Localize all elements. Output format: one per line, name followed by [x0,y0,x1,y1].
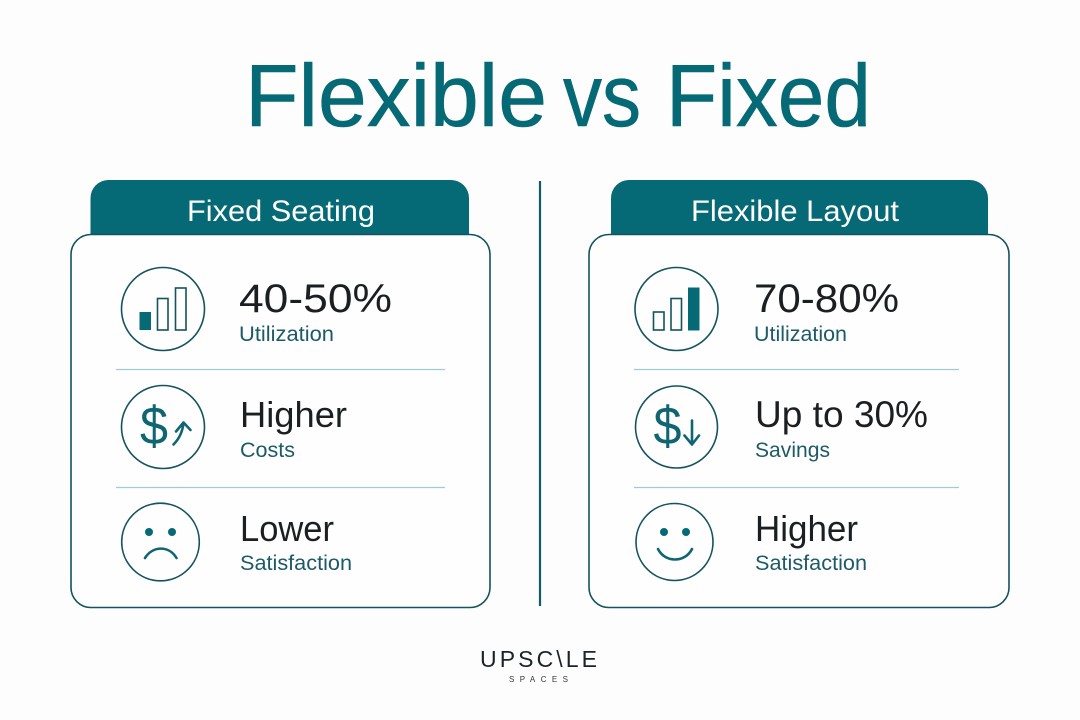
row: satisfaction [122,503,352,581]
label: savings: Savings [755,439,830,462]
stat: higher: Higher [240,394,347,435]
title: Flexible [245,46,547,145]
row: satisfaction [636,504,867,580]
stat: lower: Lower [240,508,334,549]
logo: upscale spaces [480,646,597,684]
icon: low bar chart [122,268,204,350]
header tab: flexible layout [611,180,988,240]
header tab: fixed seating: Fixed Seating [187,195,375,228]
row: savings [636,386,928,468]
logo: upscale spaces: SPACES [509,675,568,684]
title: vs [563,46,641,145]
icon: dollar with up arrow: $ [140,396,168,456]
panel: fixed seating [71,180,490,608]
header tab: fixed seating [90,180,469,240]
card: fixed seating [71,234,490,608]
row: utilization [122,268,392,350]
icon: high bar chart [635,268,718,350]
stat: 40-50%: 40-50% [239,277,392,321]
row: utilization [635,268,899,350]
label: satisfaction: Satisfaction [755,552,867,575]
icon: dollar with down arrow: $ [654,396,682,456]
title [245,46,871,145]
row: costs [122,386,347,468]
logo: upscale spaces: UPSC\LE [480,646,597,672]
label: costs: Costs [240,439,295,462]
panel: flexible layout [589,180,1009,608]
header tab: flexible layout: Flexible Layout [691,195,900,228]
icon: sad face [122,503,199,581]
icon: happy face [636,504,713,580]
label: utilization: Utilization [239,323,334,346]
stat: 70-80%: 70-80% [754,277,899,321]
title: Fixed [666,46,871,145]
label: utilization: Utilization [754,323,847,346]
card: flexible layout [589,234,1009,608]
stat: up to 30%: Up to 30% [755,394,928,435]
label: satisfaction: Satisfaction [240,552,352,575]
stat: higher: Higher [755,508,858,549]
icon: dollar with down arrow [636,386,718,468]
icon: dollar with up arrow [122,386,204,468]
